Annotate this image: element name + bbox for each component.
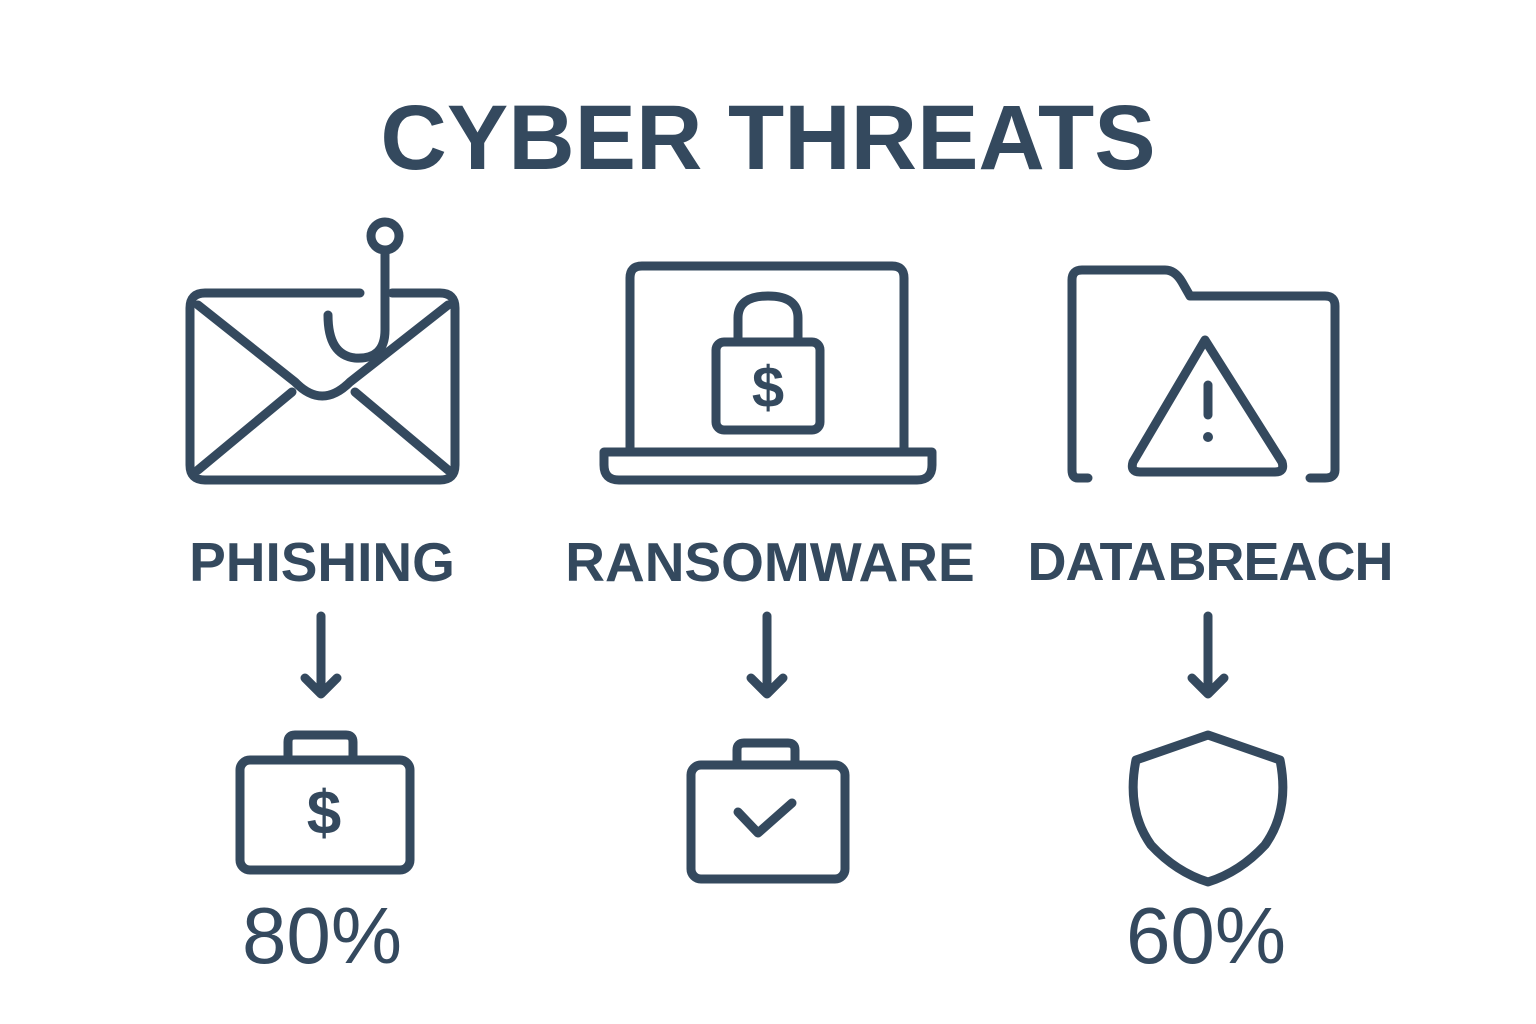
icon: dollar sign on lock: $ xyxy=(752,355,784,420)
label: data breach: DATA BREACH xyxy=(1028,532,1392,592)
icon: laptop with lock xyxy=(604,266,932,480)
icon: money briefcase xyxy=(240,735,410,870)
icon: dollar sign on briefcase: $ xyxy=(307,779,341,848)
icon: envelope with hook xyxy=(190,222,455,480)
icon: warning dot xyxy=(1203,432,1213,442)
title: CYBER THREATS xyxy=(380,87,1156,189)
label: phishing: PHISHING xyxy=(189,531,455,593)
stat: 60%: 60% xyxy=(1126,891,1286,980)
icon: shield xyxy=(1133,735,1283,882)
icon: check briefcase xyxy=(691,743,845,879)
label: ransomware: RANSOMWARE xyxy=(565,531,975,593)
stat: 80%: 80% xyxy=(242,891,402,980)
icon: folder with warning xyxy=(1072,270,1335,478)
arrows xyxy=(305,616,1224,694)
